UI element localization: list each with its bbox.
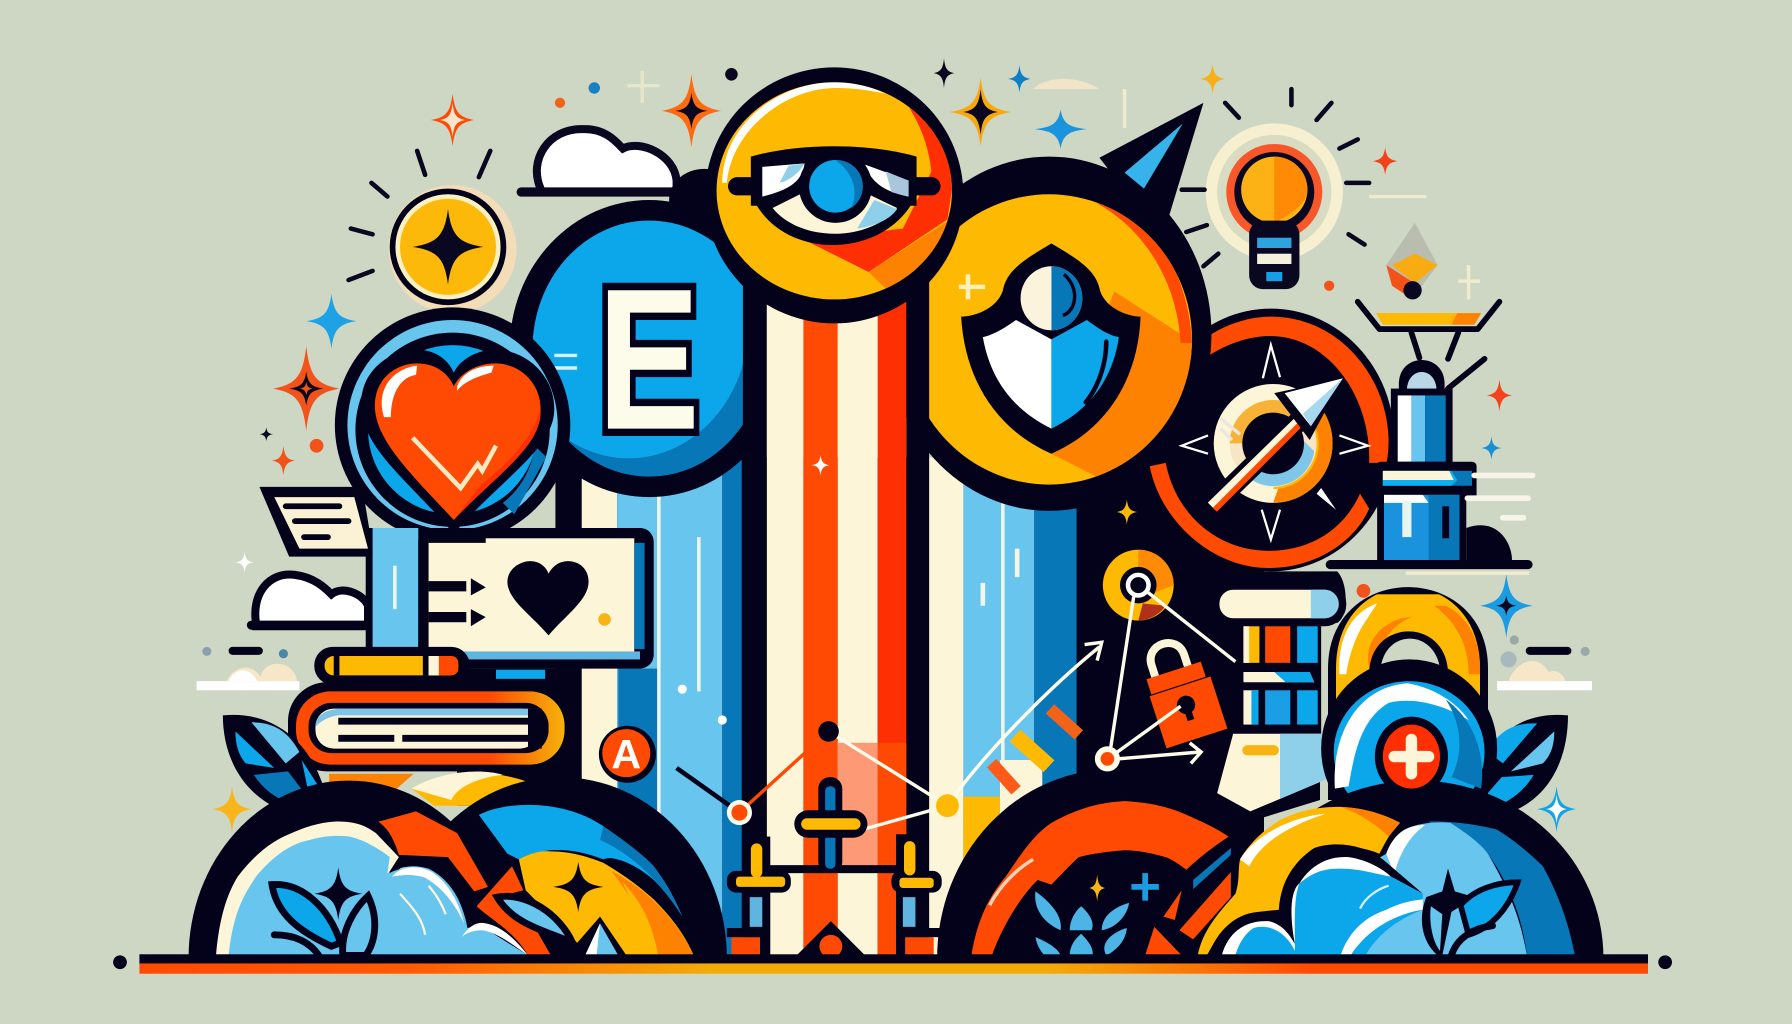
flags <box>987 704 1083 795</box>
left blue column stub <box>366 528 423 674</box>
leaf middle <box>497 896 573 943</box>
icon: right leaf <box>1474 715 1568 814</box>
right hump fill <box>479 805 682 917</box>
cloud: lower right <box>1497 635 1592 690</box>
icon: heart on blue disc <box>335 307 570 543</box>
right striped column <box>929 457 1077 955</box>
small blue strip <box>496 670 545 679</box>
small leaves <box>1035 891 1129 955</box>
arrow spike <box>1099 103 1203 229</box>
icon: left leaf <box>223 715 326 814</box>
badge A: A <box>611 731 641 777</box>
cloud: lower left <box>197 647 299 690</box>
right leaf on hill <box>1422 869 1518 955</box>
red arch <box>971 801 1231 955</box>
compass ring: lower arc <box>1150 463 1369 568</box>
cross badge <box>1375 717 1448 797</box>
icon: center cross stand <box>727 777 942 958</box>
icon: light bulb <box>1182 89 1369 289</box>
back black mass <box>457 169 1346 958</box>
panel: compass <box>1147 309 1394 571</box>
icon: note paper <box>259 487 373 557</box>
line chart <box>599 642 1102 834</box>
icon: pencil <box>314 647 470 685</box>
ground line <box>113 954 1672 974</box>
padlock <box>1135 633 1227 748</box>
icon: card with heart <box>418 528 654 669</box>
icon: shield <box>961 243 1141 454</box>
badge A <box>599 726 656 783</box>
right hill fills <box>1198 807 1575 955</box>
hill: left <box>189 772 727 960</box>
panel: shield circle <box>887 157 1211 511</box>
center striped column <box>767 286 906 955</box>
icon: eye with glasses <box>728 146 941 245</box>
icon: tower <box>1326 302 1533 575</box>
left post <box>727 837 791 958</box>
leaf on left hump <box>272 867 375 955</box>
panel: eye circle <box>705 67 963 323</box>
hill: right <box>937 769 1603 960</box>
network with padlock <box>1095 550 1235 771</box>
sparkles and dots: sky decoration <box>213 58 1576 832</box>
blue cloud <box>1208 844 1423 955</box>
icon: lock <box>1321 587 1498 800</box>
small red dot <box>1357 584 1370 598</box>
left striped column <box>582 457 742 955</box>
left hill fill <box>216 821 528 955</box>
icon: coin with star <box>349 151 517 313</box>
letter E: E <box>598 246 700 471</box>
icon: gem <box>1369 197 1438 299</box>
cloud: left <box>247 575 368 630</box>
illustration <box>113 58 1672 974</box>
panel: E circle <box>512 200 743 498</box>
icon: book <box>288 682 571 771</box>
icon: pillar <box>1211 582 1346 811</box>
right post <box>891 834 942 955</box>
cloud: top <box>517 129 688 197</box>
small yellow star <box>1117 499 1137 525</box>
